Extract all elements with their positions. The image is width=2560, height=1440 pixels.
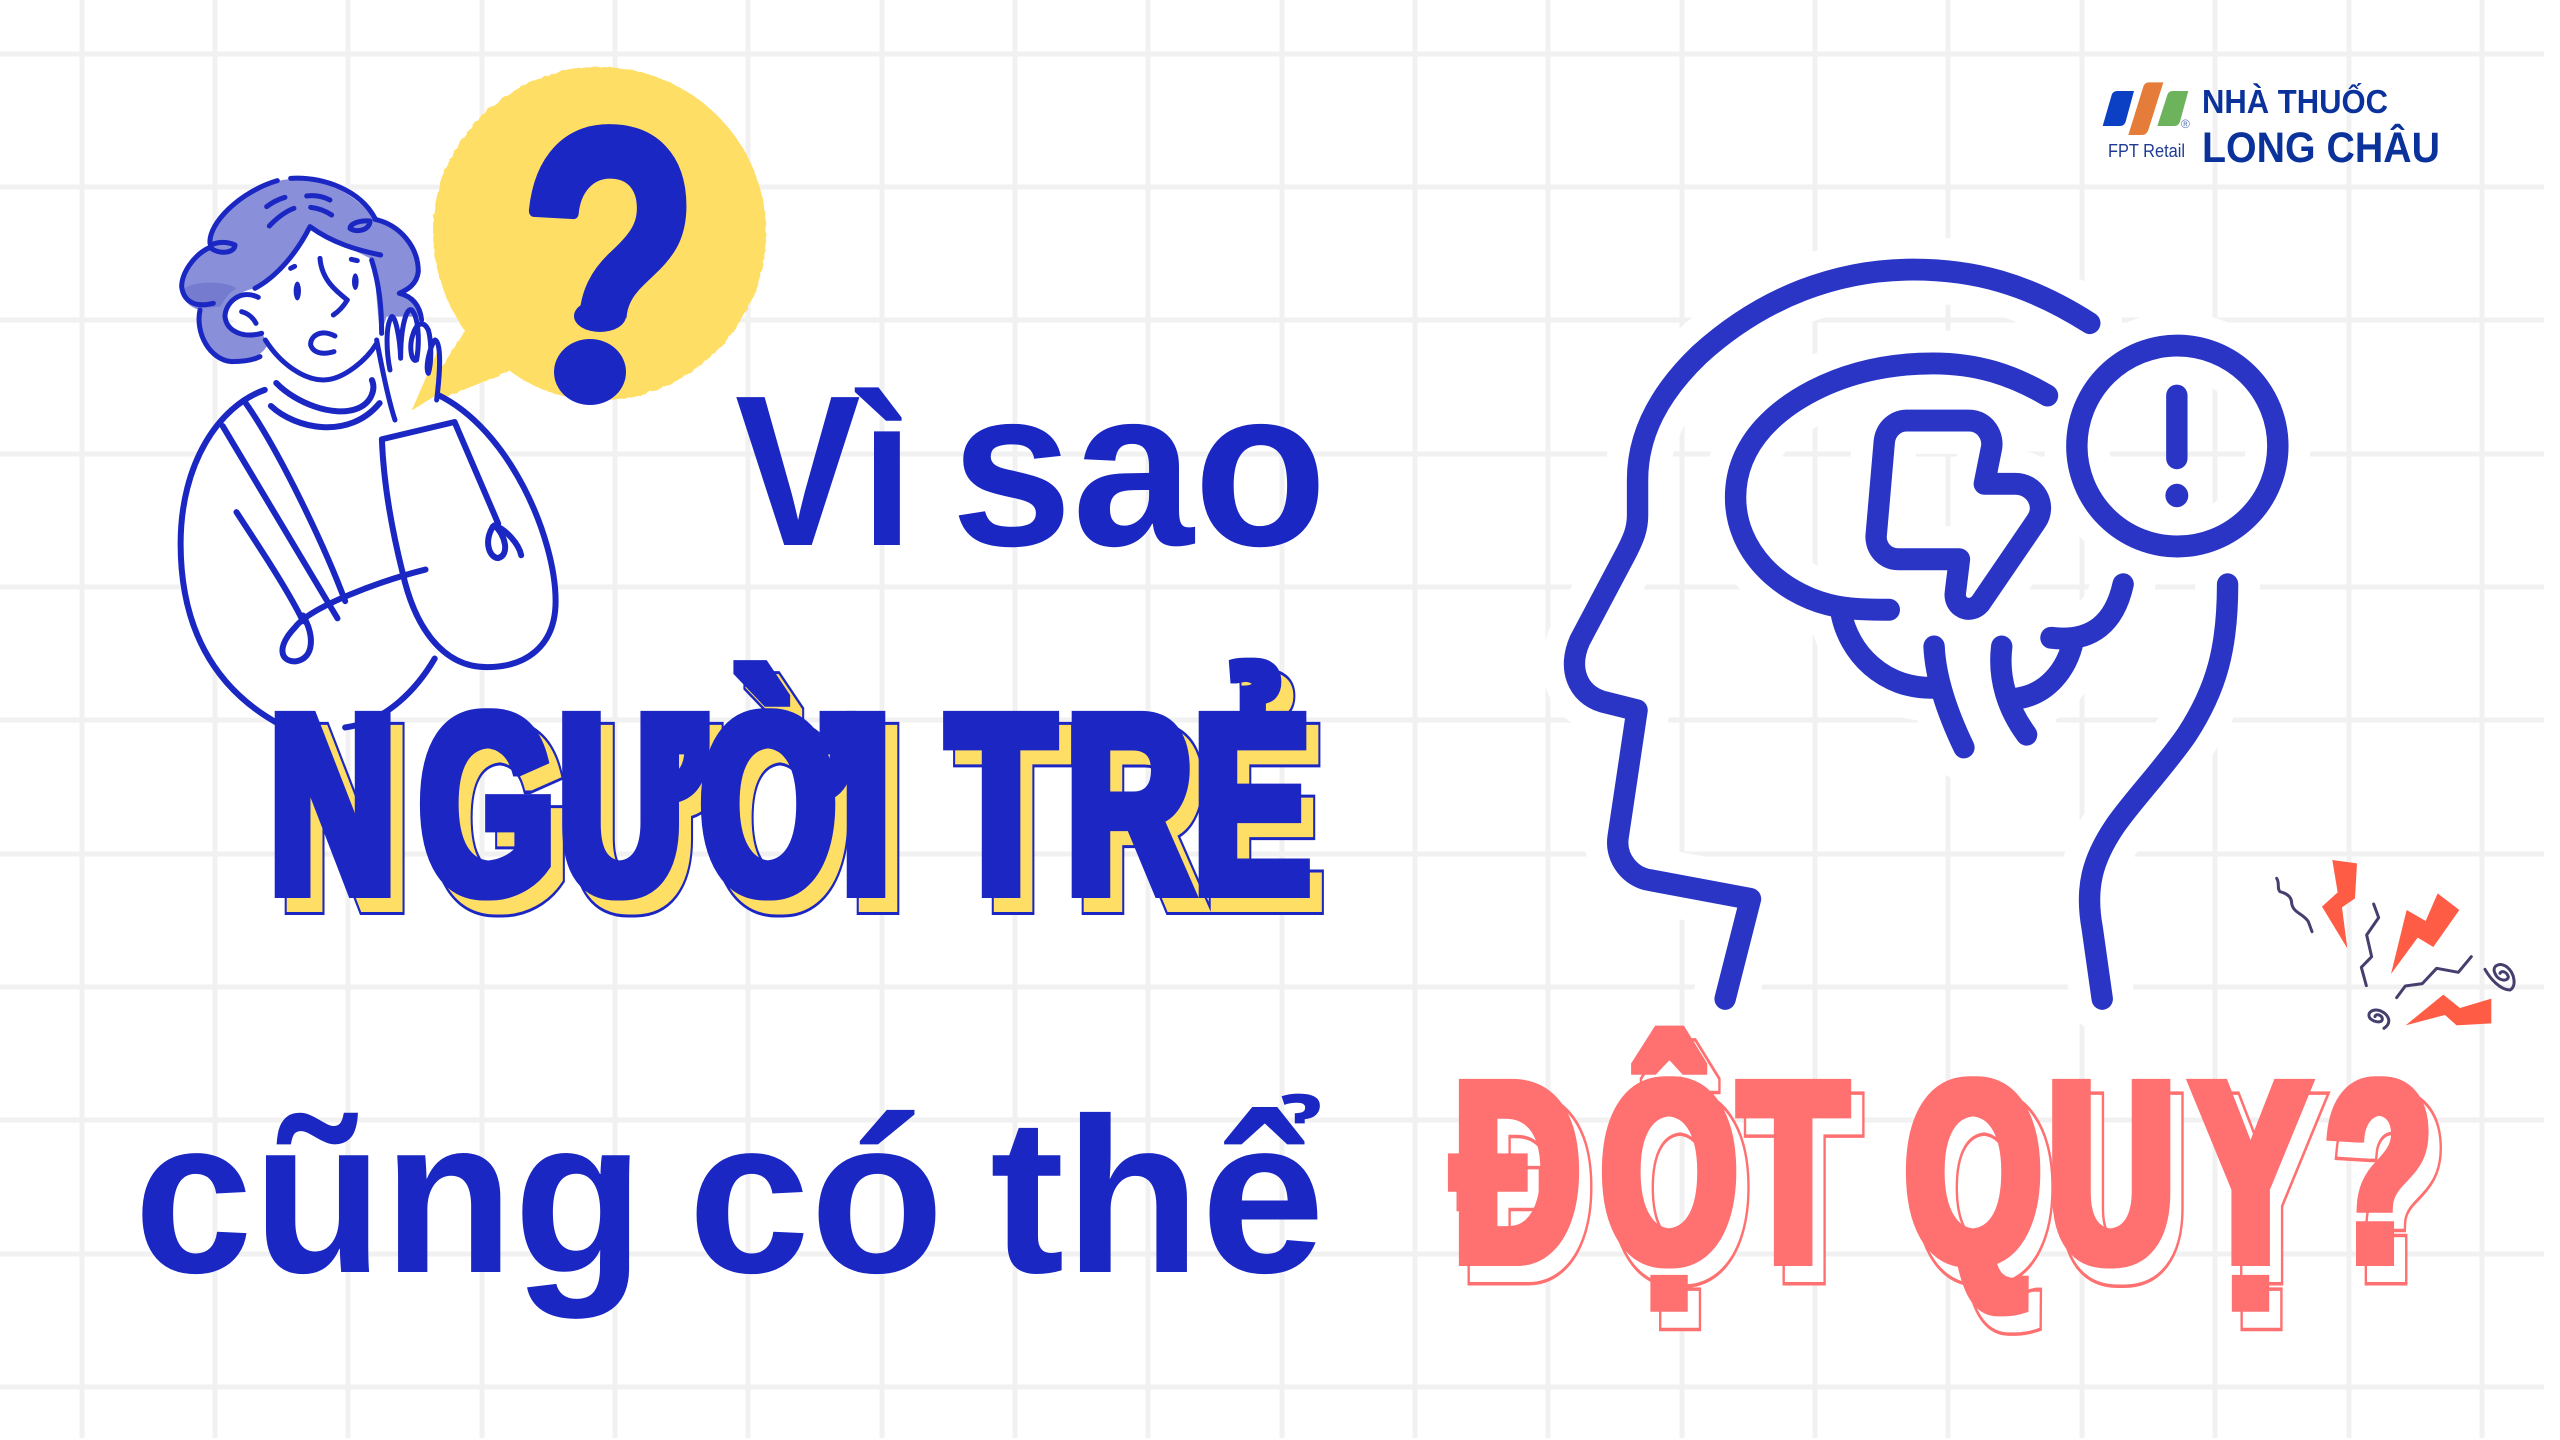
- speech bubble shape: [414, 67, 766, 410]
- brain outline: [1736, 363, 2048, 610]
- head, hair and face: [181, 178, 442, 420]
- icon: yellow speech bubble with question mark: [432, 66, 767, 405]
- icon: head profile with brain, lightning bolt and alert: [1574, 270, 2278, 999]
- brand name line 2: LONG CHÂU: [2202, 123, 2440, 172]
- heading line 3: cũng có thể: thể: [990, 1072, 1325, 1319]
- heading line 1: Vì sao: [735, 341, 1327, 593]
- heading line 1: Vì sao: Vì: [735, 350, 913, 591]
- heading line 2: NGƯỜI TRẺ extruded: NGƯỜI TRẺ: [282, 676, 1322, 961]
- heading line 4: ĐỘT QUỴ? outlined shadow: ĐỘT QUỴ?: [1465, 1046, 2443, 1331]
- heading line 4: ĐỘT QUỴ? outlined shadow: ĐỘT QUỴ?: [1454, 1030, 2432, 1315]
- lightning bolt: [1876, 421, 2040, 609]
- person body and sweater: [181, 337, 556, 727]
- FPT Retail label: FPT Retail: [2108, 141, 2185, 161]
- heading line 4: ĐỘT QUỴ? outlined shadow: ĐỘT QUỴ?: [1465, 1046, 2443, 1331]
- illustration: worried person with hand on cheek: [181, 178, 556, 727]
- heading line 3: cũng có thể: cũng: [134, 1072, 644, 1319]
- heading line 2: NGƯỜI TRẺ extruded: NGƯỜI TRẺ: [282, 676, 1322, 961]
- alert circle with exclamation mark: [2077, 346, 2278, 547]
- neck and back of head: [2089, 584, 2228, 999]
- logo mark: [2103, 82, 2188, 135]
- heading line 3: cũng có thể: [134, 1072, 1325, 1319]
- heading line 1: Vì sao: sao: [951, 341, 1327, 593]
- head outline: [1574, 270, 2090, 999]
- brand name line 1: NHÀ THUỐC: [2202, 82, 2388, 120]
- icon: pain sparks and squiggles: [2277, 860, 2514, 1028]
- question mark: ?: [520, 51, 699, 481]
- question mark: [528, 124, 686, 405]
- heading line 2: NGƯỜI TRẺ extruded: NGƯỜI TRẺ: [270, 662, 1310, 947]
- registered mark: ®: [2181, 117, 2190, 131]
- logo: FPT Retail Nhà thuốc Long Châu: [2103, 82, 2440, 172]
- brain lower lobes: [1841, 584, 2123, 747]
- heading line 3: cũng có thể: có: [688, 1072, 944, 1319]
